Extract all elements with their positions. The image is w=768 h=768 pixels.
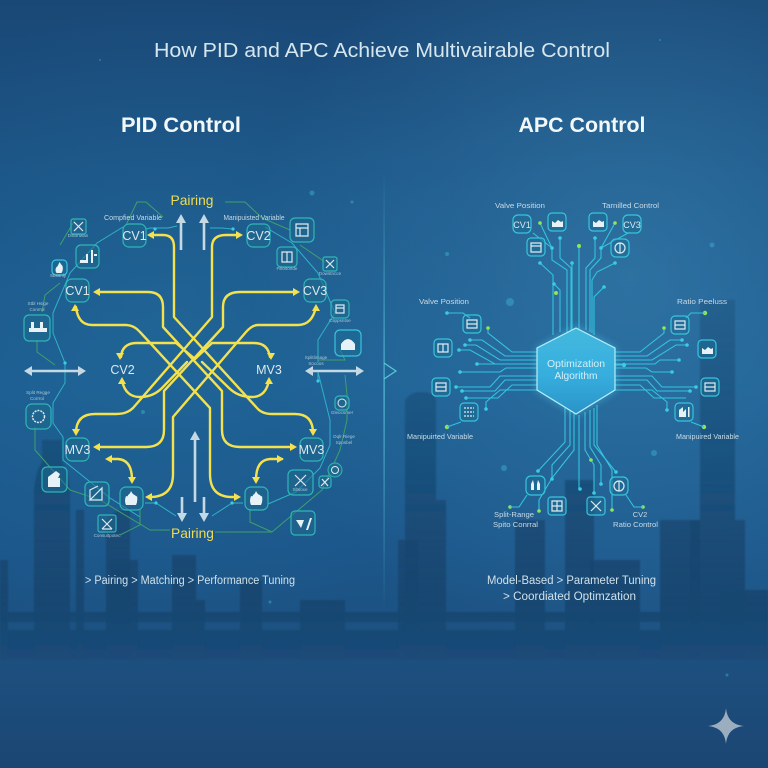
node: CV1: CV1 <box>513 220 531 230</box>
icon: right factory <box>698 340 716 358</box>
icon: right list <box>671 316 689 334</box>
icon: diagonal <box>85 482 109 506</box>
icon: cross with label <box>288 470 313 495</box>
label: CV2 Ratio Control <box>613 510 658 529</box>
node: CV3: CV3 <box>623 220 641 230</box>
heading: APC Control: APC Control <box>518 113 646 137</box>
icon: left panel <box>432 378 450 396</box>
icon: small mechanism <box>319 476 331 488</box>
text: Stbl Hsige Control <box>28 301 49 312</box>
icon: clipboard <box>329 300 351 323</box>
connector lines to labels <box>447 313 705 507</box>
label: Valve Position top: Valve Position <box>495 201 545 210</box>
icon: valves <box>76 245 99 268</box>
title: How PID and APC Achieve Multivairable Control <box>154 40 610 62</box>
icon: top-left cross: Dstonwan <box>68 233 89 238</box>
text: Split/Image Socoos: Socoos <box>308 361 324 366</box>
icon: right cross <box>319 257 342 276</box>
node: CV1 <box>513 215 531 233</box>
white up and down arrows <box>176 214 209 522</box>
label: CV2 Ratio Control: Ratio Control <box>613 520 658 529</box>
node: CV1 top: CV1 <box>122 229 147 243</box>
icon: right lower factory <box>675 403 693 421</box>
icon: window top-right <box>290 218 314 242</box>
icon: small cross with label: Consultpotec <box>94 533 121 538</box>
label: Manipulated Variable: Manipuisted Variable <box>224 213 284 222</box>
text: PID tuning steps: > Pairing > Matching > Performance Tuning <box>85 575 295 587</box>
icon: left split <box>434 339 452 357</box>
icon: left list <box>463 315 481 333</box>
text: APC tuning steps: > Coordiated Optimzation <box>503 591 636 603</box>
text: Split Regge Control: Corrrol <box>30 396 44 401</box>
label: MV3 centre: MV3 <box>256 363 282 377</box>
label: Pairing top: Pairing <box>170 192 214 208</box>
icon: valves left <box>24 315 50 341</box>
node: CV2 top: CV2 <box>246 229 271 243</box>
icon: cross bottom <box>587 497 605 515</box>
icon: valve checkmark <box>291 511 315 535</box>
node: MV3 right: MV3 <box>299 443 324 457</box>
text: Oqlr Riege Sposbel <box>333 434 355 445</box>
icon: left lower panel <box>460 403 478 421</box>
icon: right panel <box>701 378 719 396</box>
node: flame left <box>120 487 143 510</box>
icon: ring small right <box>331 396 354 415</box>
node: CV1 left <box>65 279 90 302</box>
panel: APC control diagram <box>407 201 739 529</box>
icon: cross with label: Sltsoxe <box>292 487 308 492</box>
icon: gauge <box>335 330 361 356</box>
label: Manipulated Variable right: Manipuired Variable <box>676 432 739 441</box>
yellow arrowheads <box>71 231 320 501</box>
icon: ring <box>26 404 51 429</box>
node: MV3 right <box>299 438 324 461</box>
white horizontal double arrows <box>24 366 364 376</box>
node: MV3 left: MV3 <box>65 443 90 457</box>
refinery silhouette <box>0 300 768 660</box>
heading: PID Control: PID Control <box>121 113 241 137</box>
icon: box shape <box>42 467 67 492</box>
green node dots <box>445 221 707 513</box>
text: Split/Image Socoos: Splitlimage <box>305 355 328 360</box>
icon: circle bottom <box>610 477 628 495</box>
icon: small cross with label <box>94 515 121 538</box>
text: Split Regge Control <box>26 390 50 401</box>
text: APC tuning steps: Model-Based > Parameter Tuning <box>487 575 656 587</box>
text: Stbl Hsige Control: Stbl Hsige <box>28 301 49 306</box>
icon: flame small: Sbssnly <box>50 273 67 278</box>
text: APC tuning steps <box>487 575 656 603</box>
label: Split-Range: Spito Conrral <box>493 520 538 529</box>
icon: flame bottom <box>526 476 545 495</box>
hexagon: optimization algorithm: Algorithm <box>554 370 598 382</box>
left circuit traces <box>456 328 540 409</box>
label: Tarnilled Control: Tarnilled Control <box>602 201 659 210</box>
teal and green circuit traces <box>35 202 347 535</box>
hexagon: optimization algorithm <box>536 326 616 415</box>
bottom circuit traces <box>538 405 616 511</box>
icon: right cross: Dowstncce <box>319 271 342 276</box>
icon: window <box>527 238 545 256</box>
node dots <box>445 236 698 495</box>
node: CV3 right <box>303 279 327 302</box>
label: Controlled Variable: Compfied Variable <box>104 213 162 222</box>
icon: faint panel <box>277 247 298 271</box>
icon: circle <box>611 239 629 257</box>
yellow crossing pairing arrows <box>76 235 316 497</box>
node: CV2 top <box>246 224 271 247</box>
node: CV3 <box>623 215 641 233</box>
text: Oqlr Riege Sposbel: Oqlr Riege <box>333 434 355 439</box>
right circuit traces <box>612 328 696 410</box>
icon: faint panel: Filiosonde <box>277 266 298 271</box>
label: Split-Range: Split-Range <box>494 510 534 519</box>
panel: PID control diagram <box>24 192 364 541</box>
icon: grid bottom <box>548 497 566 515</box>
node: CV1 top <box>122 224 147 247</box>
divider with chevron <box>384 170 396 610</box>
label: CV2 centre: CV2 <box>110 363 135 377</box>
label: Pairing bottom: Pairing <box>171 525 214 541</box>
node: CV3 right: CV3 <box>303 284 327 298</box>
label: Valve Position left: Valve Position <box>419 297 469 306</box>
label: Manipulated Variable left: Manipuirted Variable <box>407 432 473 441</box>
icon: factory top 2 <box>589 213 607 231</box>
icon: ring small right: Gleocsmer <box>331 410 354 415</box>
text: Oqlr Riege Sposbel: Sposbel <box>336 440 352 445</box>
icon: factory top 1 <box>548 213 566 231</box>
label: Split-Range <box>493 510 538 529</box>
node: flame right <box>245 487 268 510</box>
floating particles <box>99 39 728 676</box>
node: CV1 left: CV1 <box>65 284 90 298</box>
icon: small ring <box>328 463 342 477</box>
text: Stbl Hsige Control: Conrrol <box>29 307 45 312</box>
label: Ratio Peeluss: Ratio Peeluss <box>677 297 727 306</box>
icon: sparkle watermark <box>708 708 744 744</box>
text: Split Regge Control: Split Regge <box>26 390 50 395</box>
icon: flame small <box>50 260 67 278</box>
node: MV3 left <box>65 438 90 461</box>
icon: clipboard: Clippsntoe <box>329 318 351 323</box>
icon: top-left cross <box>68 219 89 238</box>
hexagon label: Optimization <box>547 358 605 370</box>
label: CV2 Ratio Control: CV2 <box>633 510 647 519</box>
top circuit traces <box>533 223 630 335</box>
text: Split/Image Socoos <box>305 355 328 366</box>
